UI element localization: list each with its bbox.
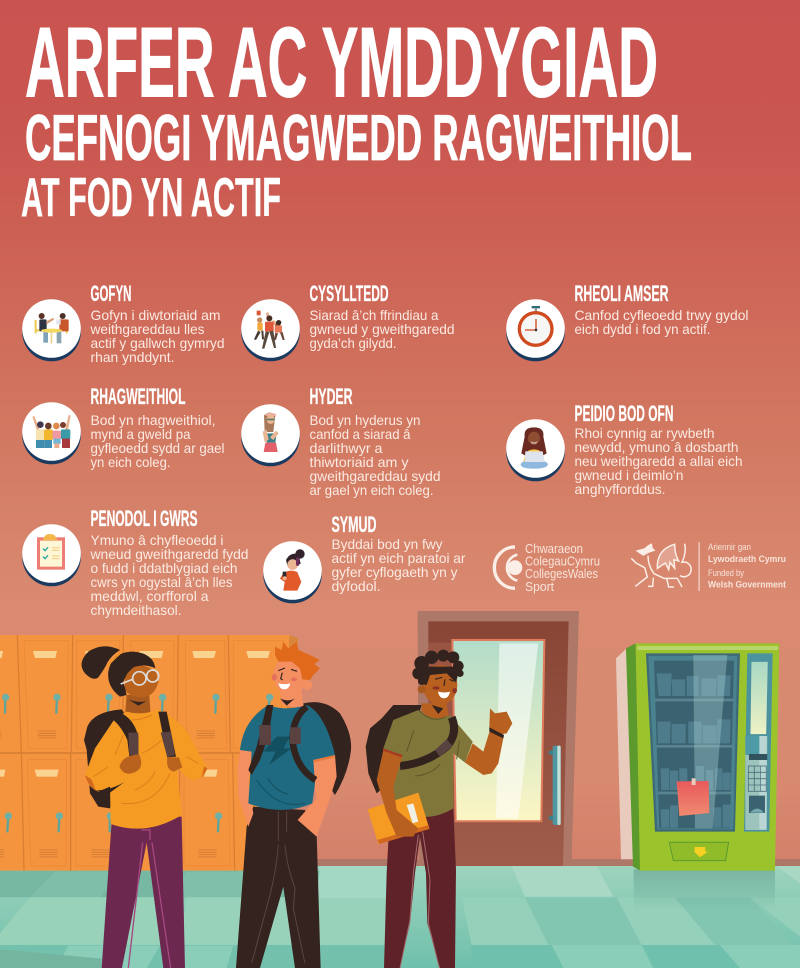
- arms: [238, 750, 253, 827]
- text block: chymdeithasol.: [90, 602, 182, 618]
- text block: rhan ynddynt.: [90, 349, 174, 365]
- text block: [90, 412, 224, 470]
- text block: wneud gweithgaredd fydd: [90, 546, 248, 562]
- door handle: [553, 746, 561, 825]
- panel: hyder: [241, 384, 440, 498]
- text block: o fudd i ddatblygiad eich: [90, 560, 238, 576]
- glass front: [646, 653, 740, 832]
- heading: CYSYLLTEDD: [310, 281, 388, 306]
- backpack: [366, 705, 422, 793]
- text block: anghyfforddus.: [574, 481, 666, 497]
- text block: mynd a gweld pa: [90, 426, 191, 442]
- hands: [119, 754, 141, 774]
- vending reflection: [634, 869, 775, 911]
- text block: actif y gallwch gymryd: [90, 335, 224, 351]
- heading: HYDER: [310, 384, 352, 409]
- book: [368, 793, 429, 844]
- text block: Rhoi cynnig ar rywbeth: [574, 425, 714, 441]
- logo: Chwaraeon ColegauCymru: Chwaraeon: [525, 542, 583, 556]
- panel: gofyn: [22, 281, 225, 365]
- icon: two people at a table: [22, 299, 81, 361]
- face: [278, 668, 297, 680]
- neck: [280, 692, 303, 707]
- panel: rhagweithiol: [22, 384, 225, 470]
- text block: [332, 536, 466, 594]
- logo: Welsh Government dragon: Welsh Government: [708, 580, 787, 590]
- raised arm: [465, 730, 504, 775]
- skirting board: [0, 859, 800, 867]
- hair: [275, 642, 320, 680]
- text block: gyfer cyflogaeth yn y: [332, 564, 458, 580]
- head: [125, 665, 158, 697]
- logo: Welsh Government dragon: Lywodraeth Cymru: [708, 554, 786, 565]
- icon: girl with laptop: [506, 419, 565, 481]
- panel: penodol i gwrs: [22, 506, 249, 618]
- strap: [400, 717, 454, 766]
- curly hair: [412, 650, 464, 685]
- control panel: [744, 653, 773, 832]
- straps: [248, 705, 273, 775]
- icon: clipboard checklist: [22, 524, 81, 586]
- text block: neu weithgaredd a allai eich: [574, 453, 742, 469]
- text block: cwrs yn ogystal â’ch lles: [90, 574, 232, 590]
- straps: [109, 711, 138, 756]
- t-shirt: [383, 710, 473, 817]
- text block: [90, 532, 248, 618]
- text block: gyda’ch gilydd.: [310, 335, 396, 351]
- text block: dyfodol.: [332, 578, 380, 594]
- icon: three friends jumping: [241, 299, 300, 361]
- trousers: [102, 817, 185, 968]
- floor tiles: [0, 866, 800, 968]
- title: [21, 6, 692, 228]
- heading: RHAGWEITHIOL: [90, 384, 186, 409]
- heading: RHEOLI AMSER: [574, 281, 668, 306]
- text block: yn eich coleg.: [90, 454, 170, 470]
- logo: Welsh Government dragon: Funded by: [708, 568, 744, 579]
- trousers: [236, 807, 321, 968]
- text block: Ymuno â chyfleoedd i: [90, 532, 224, 548]
- neck: [125, 695, 151, 716]
- logo: Welsh Government dragon: [631, 542, 787, 591]
- text block: gwneud y gweithgaredd: [310, 321, 454, 337]
- dispensing flap: [669, 842, 729, 861]
- title: AT FOD YN ACTIF: [21, 166, 281, 228]
- face: [435, 677, 454, 686]
- text block: [574, 425, 742, 497]
- logo: Welsh Government dragon: Ariennir gan: [708, 542, 751, 553]
- icon: stopwatch: [506, 299, 565, 361]
- logo: Chwaraeon ColegauCymru: Sport: [525, 580, 554, 594]
- character: girl in yellow sweater: [82, 646, 207, 968]
- backpack: [84, 709, 138, 808]
- text block: darlithwyr a: [310, 440, 383, 456]
- text block: Gofyn i diwtoriaid am: [90, 307, 220, 323]
- door window: [452, 640, 544, 821]
- text block: gyfleoedd sydd ar gael: [90, 440, 224, 456]
- text block: [310, 307, 454, 351]
- text block: thiwtoriaid am y: [310, 454, 408, 470]
- text block: [90, 307, 224, 365]
- text block: Byddai bod yn fwy: [332, 536, 442, 552]
- sweater: [85, 709, 207, 829]
- text block: ar gael yn eich coleg.: [310, 482, 434, 498]
- head: [273, 657, 307, 695]
- text block: [574, 307, 748, 337]
- heading: GOFYN: [90, 281, 132, 306]
- left arm and hand: [377, 750, 418, 837]
- logo: Chwaraeon ColegauCymru: ColegauCymru: [525, 554, 600, 568]
- panel: rheoli amser: [506, 281, 748, 361]
- ponytail: [82, 646, 120, 679]
- heading: PENODOL I GWRS: [90, 506, 198, 531]
- icon: confident girl: [241, 404, 300, 466]
- text block: Bod yn rhagweithiol,: [90, 412, 216, 428]
- text block: canfod a siarad â: [310, 426, 411, 442]
- logo: Chwaraeon ColegauCymru: CollegesWales: [525, 567, 598, 581]
- door: [418, 611, 579, 866]
- text block: meddwl, corfforol a: [90, 588, 209, 604]
- lockers: [0, 635, 298, 871]
- text block: gwneud i deimlo’n: [574, 467, 684, 483]
- text block: Bod yn hyderus yn: [310, 412, 420, 428]
- panel: symud: [263, 512, 466, 603]
- text block: Canfod cyfleoedd trwy gydol: [574, 307, 748, 323]
- icon: girl with phone and headphones: [263, 541, 322, 603]
- backpack: [303, 702, 351, 795]
- text block: Siarad â’ch ffrindiau a: [310, 307, 439, 323]
- text block: actif yn eich paratoi ar: [332, 550, 466, 566]
- panel: cysylltedd: [241, 281, 454, 361]
- head: [423, 665, 457, 705]
- logo: Chwaraeon ColegauCymru: [494, 542, 600, 594]
- glasses: [121, 670, 159, 685]
- text block: weithgareddau lles: [90, 321, 204, 337]
- red note: [677, 781, 709, 816]
- text block: newydd, ymuno â dosbarth: [574, 439, 738, 455]
- t-shirt: [240, 705, 335, 810]
- text block: eich dydd i fod yn actif.: [574, 321, 710, 337]
- icon: group of friends cheering: [22, 402, 81, 464]
- heading: PEIDIO BOD OFN: [574, 401, 674, 426]
- heading: SYMUD: [332, 512, 376, 537]
- trousers: [384, 808, 456, 968]
- neck: [422, 703, 448, 722]
- character: boy in teal t-shirt: [236, 642, 351, 968]
- character: boy in olive t-shirt: [366, 650, 512, 968]
- panel: peidio bod ofn: [506, 401, 742, 497]
- text block: [310, 412, 440, 498]
- vending machine: [616, 643, 779, 871]
- text block: gweithgareddau sydd: [310, 468, 440, 484]
